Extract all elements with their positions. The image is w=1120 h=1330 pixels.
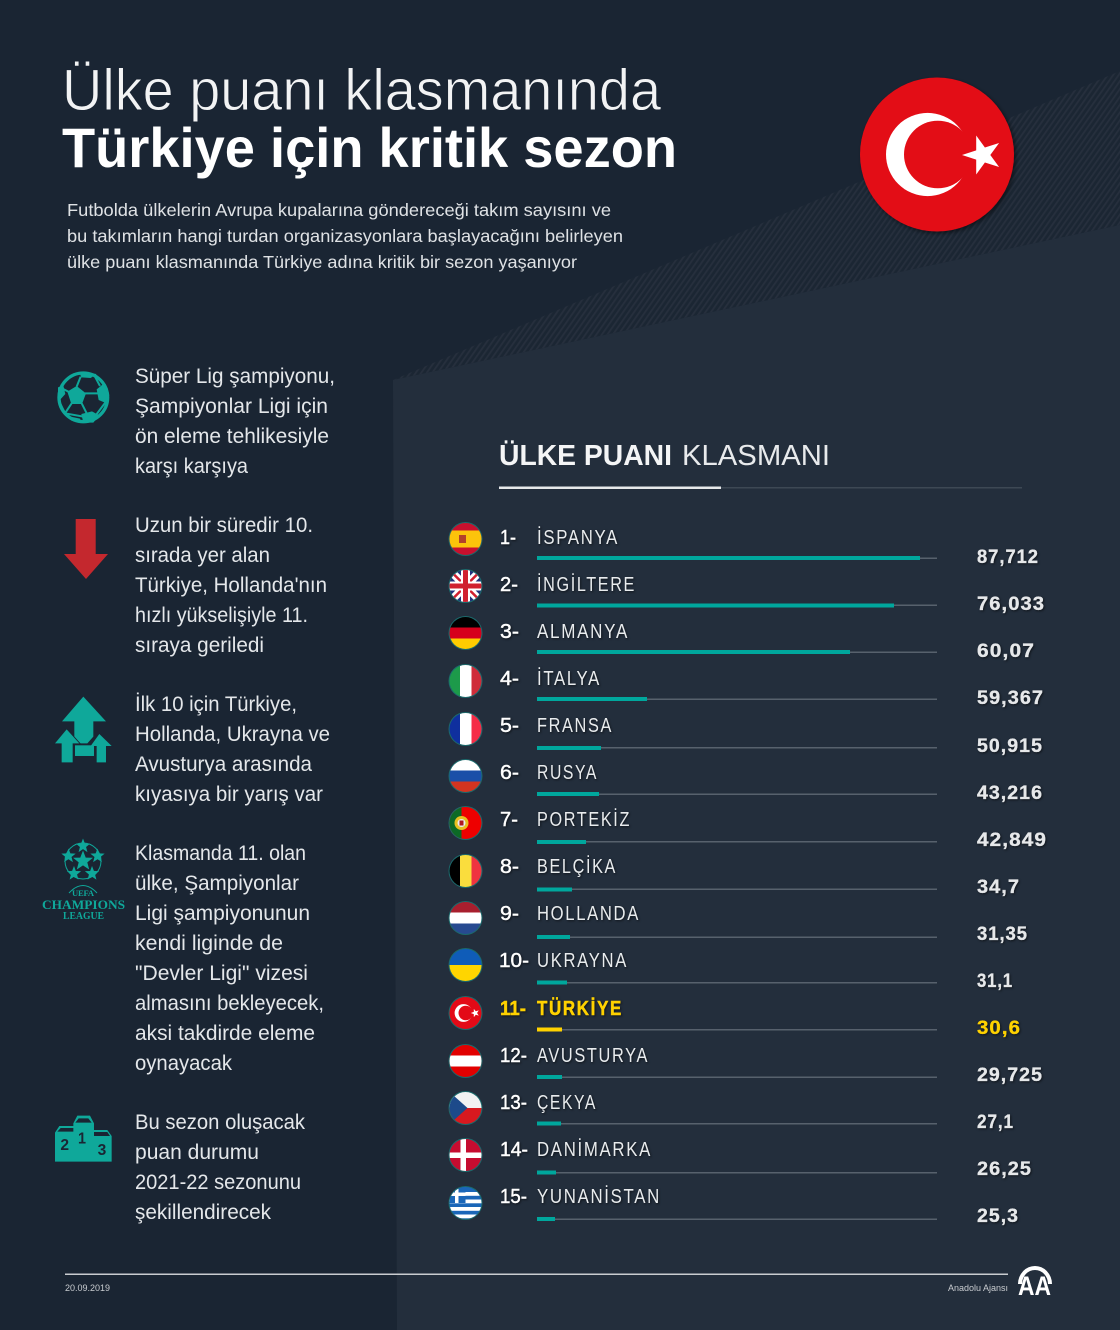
row 2: İngiltere bbox=[448, 569, 1045, 615]
footer line bbox=[65, 1274, 1008, 1275]
row 5: Fransa: FRANSA bbox=[537, 715, 613, 737]
text block: Klasmanda 11.: oynayacak bbox=[135, 1052, 232, 1075]
row 8: Belçika: BELÇİKA bbox=[537, 855, 617, 878]
row 14: Danimarka bbox=[448, 1138, 1032, 1180]
row 11: Türkiye: 30,6 bbox=[977, 1018, 1021, 1039]
row 4: İtalya: 59,367 bbox=[977, 688, 1044, 709]
text block: Uzun bir süredir bbox=[135, 514, 327, 657]
row 1: İspanya: 87,712 bbox=[977, 547, 1039, 568]
row 2: İngiltere: İNGİLTERE bbox=[537, 573, 636, 596]
row 8: Belçika: 34,7 bbox=[977, 877, 1020, 898]
row 1: İspanya: 1- bbox=[500, 527, 516, 549]
row 3: Almanya: ALMANYA bbox=[537, 621, 629, 643]
ranking heading: ÜLKE PUANI bbox=[499, 439, 672, 472]
intro text: bu takımların hangi turdan organizasyonlara başlayacağını belirleyen bbox=[67, 226, 623, 246]
text block: Klasmanda 11.: almasını bekleyecek, bbox=[135, 992, 324, 1015]
row 15: Yunanistan: 25,3 bbox=[977, 1206, 1019, 1227]
text block: Klasmanda 11.: kendi liginde de bbox=[135, 932, 283, 955]
icon: Champions League logo: LEAGUE bbox=[63, 911, 104, 922]
text block: Süper Lig: Süper Lig şampiyonu, bbox=[135, 365, 335, 388]
row 15: Yunanistan: 15- bbox=[500, 1186, 527, 1208]
text block: İlk 10: Hollanda, Ukrayna ve bbox=[135, 723, 330, 746]
text block: Klasmanda 11. bbox=[135, 842, 324, 1075]
icon: podium: 3 bbox=[98, 1142, 106, 1159]
row 11: Türkiye bbox=[448, 996, 1021, 1039]
row 3: Almanya bbox=[448, 616, 1035, 662]
row 10: Ukrayna: 10- bbox=[499, 950, 529, 972]
text block: Uzun bir süredir: Türkiye, Hollanda'nın bbox=[135, 574, 327, 597]
row 9: Hollanda: 9- bbox=[500, 903, 519, 925]
text block: Klasmanda 11.: Ligi şampiyonunun bbox=[135, 902, 310, 925]
text block: Klasmanda 11.: Klasmanda 11. olan bbox=[135, 842, 306, 865]
row 2: İngiltere: 2- bbox=[500, 574, 518, 596]
row 5: Fransa: 50,915 bbox=[977, 736, 1043, 757]
row 4: İtalya: İTALYA bbox=[537, 667, 601, 690]
row 4: İtalya: 4- bbox=[500, 668, 519, 690]
row 7: Portekiz: PORTEKİZ bbox=[537, 808, 631, 831]
row 10: Ukrayna: UKRAYNA bbox=[537, 950, 628, 972]
source: Anadolu Ajansı bbox=[948, 1283, 1008, 1293]
icon: AA logo: AA bbox=[1018, 1271, 1051, 1301]
row 12: Avusturya: 29,725 bbox=[977, 1065, 1043, 1086]
text block: Klasmanda 11.: aksi takdirde eleme bbox=[135, 1022, 315, 1045]
row 1: İspanya: İSPANYA bbox=[537, 526, 619, 549]
row 14: Danimarka: DANİMARKA bbox=[537, 1138, 652, 1161]
row 2: İngiltere: 76,033 bbox=[977, 594, 1045, 615]
row 13: Çekya bbox=[448, 1091, 1014, 1133]
row 5: Fransa: 5- bbox=[500, 715, 519, 737]
row 3: Almanya: 60,07 bbox=[977, 641, 1035, 662]
icon: football bbox=[58, 372, 109, 423]
icon: Champions League logo: UEFA bbox=[72, 888, 95, 898]
row 4: İtalya bbox=[448, 664, 1044, 709]
row 14: Danimarka: 14- bbox=[500, 1139, 528, 1161]
row 13: Çekya: 13- bbox=[500, 1092, 527, 1114]
row 6: Rusya bbox=[448, 759, 1043, 804]
ranking heading: KLASMANI bbox=[682, 440, 830, 472]
text block: Bu sezon: puan durumu bbox=[135, 1141, 259, 1164]
text block: Süper Lig: Şampiyonlar Ligi için bbox=[135, 395, 328, 418]
row 11: Türkiye: 11- bbox=[500, 998, 526, 1020]
text block: İlk 10: İlk 10 için Türkiye, bbox=[135, 693, 297, 716]
row 7: Portekiz: 7- bbox=[500, 809, 518, 831]
icon: Turkish flag bbox=[860, 78, 1014, 232]
text block: Bu sezon: Bu sezon oluşacak bbox=[135, 1111, 305, 1134]
row 6: Rusya: 43,216 bbox=[977, 783, 1043, 804]
row 13: Çekya: ÇEKYA bbox=[537, 1092, 597, 1114]
text block: Bu sezon bbox=[135, 1111, 305, 1224]
text block: Klasmanda 11.: "Devler Ligi" vizesi bbox=[135, 962, 308, 985]
row 15: Yunanistan bbox=[448, 1185, 1019, 1227]
icon: red down arrow bbox=[64, 519, 108, 579]
intro text: Futbolda ülkelerin Avrupa kupalarına göndereceği takım sayısını ve bbox=[67, 200, 611, 220]
row 9: Hollanda: 31,35 bbox=[977, 924, 1028, 945]
ranking heading bbox=[499, 439, 1022, 489]
icon: teal up arrows bbox=[55, 697, 112, 762]
text block: Klasmanda 11.: ülke, Şampiyonlar bbox=[135, 872, 299, 895]
text block: Süper Lig: ön eleme tehlikesiyle bbox=[135, 425, 329, 448]
icon: podium: 2 bbox=[60, 1137, 69, 1154]
icon: Champions League logo: CHAMPIONS bbox=[42, 897, 125, 912]
row 1: İspanya bbox=[448, 522, 1039, 568]
row 10: Ukrayna bbox=[448, 948, 1013, 992]
row 14: Danimarka: 26,25 bbox=[977, 1159, 1032, 1180]
date: 20.09.2019 bbox=[65, 1283, 110, 1293]
row 12: Avusturya bbox=[448, 1044, 1043, 1086]
row 8: Belçika: 8- bbox=[500, 856, 519, 878]
title: Ülke puanı klasmanında bbox=[62, 58, 662, 123]
hatched diagonal band bbox=[393, 71, 1120, 380]
intro text: ülke puanı klasmanında Türkiye adına kritik bir sezon yaşanıyor bbox=[67, 252, 577, 272]
row 11: Türkiye: TÜRKİYE bbox=[537, 997, 623, 1020]
row 9: Hollanda: HOLLANDA bbox=[537, 903, 640, 925]
row 6: Rusya: RUSYA bbox=[537, 762, 598, 784]
text block: İlk 10 bbox=[135, 693, 330, 806]
row 8: Belçika bbox=[448, 854, 1020, 898]
title bbox=[62, 58, 677, 179]
row 10: Ukrayna: 31,1 bbox=[977, 971, 1013, 992]
row 15: Yunanistan: YUNANİSTAN bbox=[537, 1185, 661, 1208]
title: Türkiye için kritik sezon bbox=[62, 116, 677, 179]
text block: İlk 10: Avusturya arasında bbox=[135, 753, 312, 776]
row 3: Almanya: 3- bbox=[500, 621, 519, 643]
icon: podium: 1 bbox=[78, 1130, 86, 1147]
text block: Uzun bir süredir: Uzun bir süredir 10. bbox=[135, 514, 313, 537]
row 9: Hollanda bbox=[448, 901, 1028, 945]
row 13: Çekya: 27,1 bbox=[977, 1112, 1014, 1133]
icon: Champions League logo bbox=[42, 838, 125, 922]
intro text bbox=[67, 200, 623, 272]
panel: ranking background bbox=[393, 225, 1120, 1330]
text block: Bu sezon: 2021-22 sezonunu bbox=[135, 1171, 301, 1194]
text block: Uzun bir süredir: sırada yer alan bbox=[135, 544, 270, 567]
row 12: Avusturya: AVUSTURYA bbox=[537, 1045, 649, 1067]
row 7: Portekiz bbox=[448, 806, 1047, 851]
text block: Süper Lig bbox=[135, 365, 335, 478]
row 5: Fransa bbox=[448, 712, 1043, 757]
text block: Uzun bir süredir: sıraya geriledi bbox=[135, 634, 264, 657]
row 7: Portekiz: 42,849 bbox=[977, 830, 1047, 851]
text block: Süper Lig: karşı karşıya bbox=[135, 455, 248, 478]
row 12: Avusturya: 12- bbox=[500, 1045, 527, 1067]
text block: Uzun bir süredir: hızlı yükselişiyle 11. bbox=[135, 604, 308, 627]
row 6: Rusya: 6- bbox=[500, 762, 519, 784]
text block: Bu sezon: şekillendirecek bbox=[135, 1201, 271, 1224]
icon: podium bbox=[55, 1116, 112, 1162]
text block: İlk 10: kıyasıya bir yarış var bbox=[135, 783, 323, 806]
